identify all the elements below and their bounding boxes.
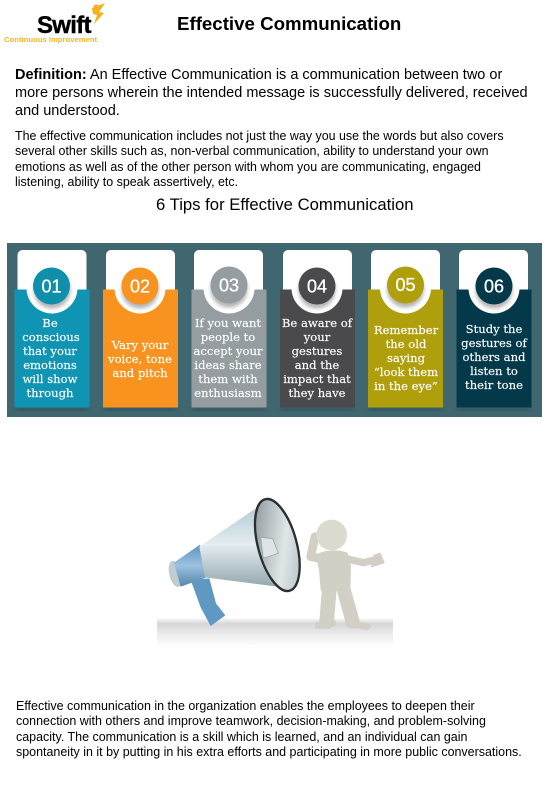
closing paragraph: Effective communication in the organization enables the employees to deepen their bbox=[16, 699, 475, 713]
tip card 3: If you want bbox=[195, 316, 261, 330]
tip card 6: listen to bbox=[470, 364, 518, 378]
intro paragraph bbox=[15, 129, 504, 189]
title: Effective Communication bbox=[177, 13, 401, 34]
tip card 6 bbox=[456, 250, 532, 411]
tip card 6: 06 bbox=[484, 276, 504, 296]
tip card 3 bbox=[192, 250, 266, 411]
megaphone horn bbox=[199, 500, 293, 589]
tip card 4: Be aware of bbox=[282, 316, 353, 330]
torso bbox=[317, 551, 350, 590]
intro paragraph: The effective communication includes not just the way you use the words but also covers bbox=[15, 129, 504, 143]
intro paragraph: several other skills such as, non-verbal communication, ability to understand your own bbox=[15, 144, 489, 158]
tip card 2: Vary your bbox=[111, 338, 169, 352]
tip card 3: people to bbox=[201, 330, 255, 344]
tip card 5: saying bbox=[387, 351, 426, 365]
floor shadow bbox=[157, 618, 393, 645]
tip card 3: enthusiasm bbox=[194, 386, 262, 400]
tip card 6: gestures of bbox=[461, 336, 528, 350]
tip card 6: others and bbox=[463, 350, 526, 364]
tip card 2: and pitch bbox=[112, 366, 168, 380]
megaphone handle bbox=[191, 578, 225, 626]
megaphone blue body bbox=[174, 545, 207, 587]
tip card 4: and the bbox=[295, 358, 339, 372]
tip card 5: “look them bbox=[374, 365, 438, 379]
feet bbox=[318, 623, 333, 625]
intro paragraph: listening, ability to speak assertively, etc. bbox=[15, 175, 238, 189]
definition text bbox=[15, 67, 528, 119]
closing paragraph: capacity. The communication is a skill which is learned, and an individual can gain bbox=[16, 730, 467, 744]
tip card 4: gestures bbox=[292, 344, 342, 358]
tip card 3: ideas share bbox=[194, 358, 262, 372]
tip card 1: conscious bbox=[22, 330, 80, 344]
closing paragraph: connection with others and improve teamwork, decision-making, and problem-solving bbox=[16, 714, 486, 728]
tip card 6: their tone bbox=[465, 378, 523, 392]
tip card 1: will show bbox=[22, 372, 78, 386]
head bbox=[316, 520, 347, 550]
tip card 3: them with bbox=[198, 372, 258, 386]
tip card 5: in the eye” bbox=[374, 379, 438, 393]
tip card 4: they have bbox=[288, 386, 346, 400]
tip card 1: through bbox=[26, 386, 74, 400]
megaphone rim bbox=[246, 494, 308, 596]
tip card 1: Be bbox=[42, 316, 58, 330]
tip card 1: that your bbox=[23, 344, 77, 358]
tip card 1 bbox=[14, 250, 90, 411]
closing paragraph: spontaneity in it by putting in his extra efforts and participating in more public conversations. bbox=[16, 745, 522, 759]
logo: Swift Continuous Improvement bbox=[4, 3, 105, 44]
left arm bbox=[311, 537, 320, 558]
section heading: 6 Tips for Effective Communication bbox=[156, 195, 414, 214]
definition text: and understood. bbox=[15, 103, 120, 119]
tip card 2: 02 bbox=[130, 276, 150, 296]
tip card 3: 03 bbox=[219, 276, 239, 296]
icon: logo running figure bbox=[92, 3, 105, 24]
tip card 4 bbox=[280, 250, 355, 411]
tip card 6: Study the bbox=[466, 322, 522, 336]
right arm bbox=[345, 558, 377, 563]
tip card 2: voice, tone bbox=[107, 352, 172, 366]
hand bbox=[372, 553, 384, 567]
tip card 1: 01 bbox=[41, 276, 62, 296]
tip card 5 bbox=[368, 250, 443, 411]
definition text: Definition: An Effective Communication is a communication between two or bbox=[15, 67, 502, 83]
intro paragraph: emotions as well as of the other person with whom you are communicating, engaged bbox=[15, 160, 481, 174]
closing paragraph bbox=[16, 699, 522, 759]
tip card 3: accept your bbox=[193, 344, 263, 358]
person bbox=[311, 520, 384, 627]
tip card 5: 05 bbox=[395, 275, 416, 295]
legs bbox=[327, 588, 329, 622]
tip card 4: impact that bbox=[283, 372, 351, 386]
tip card 4: 04 bbox=[307, 276, 327, 296]
tip card 5: Remember bbox=[374, 323, 439, 337]
logo wordmark: Swift bbox=[37, 12, 91, 39]
definition text: more persons wherein the intended message is successfully delivered, received bbox=[15, 85, 528, 101]
megaphone driver bbox=[261, 537, 278, 558]
logo tagline: Continuous Improvement bbox=[4, 35, 97, 44]
tip card 5: the old bbox=[386, 337, 427, 351]
megaphone grille bbox=[166, 560, 184, 588]
tip card 4: your bbox=[303, 330, 331, 344]
tip card 2 bbox=[103, 250, 178, 411]
tip card 1: emotions bbox=[23, 358, 77, 372]
